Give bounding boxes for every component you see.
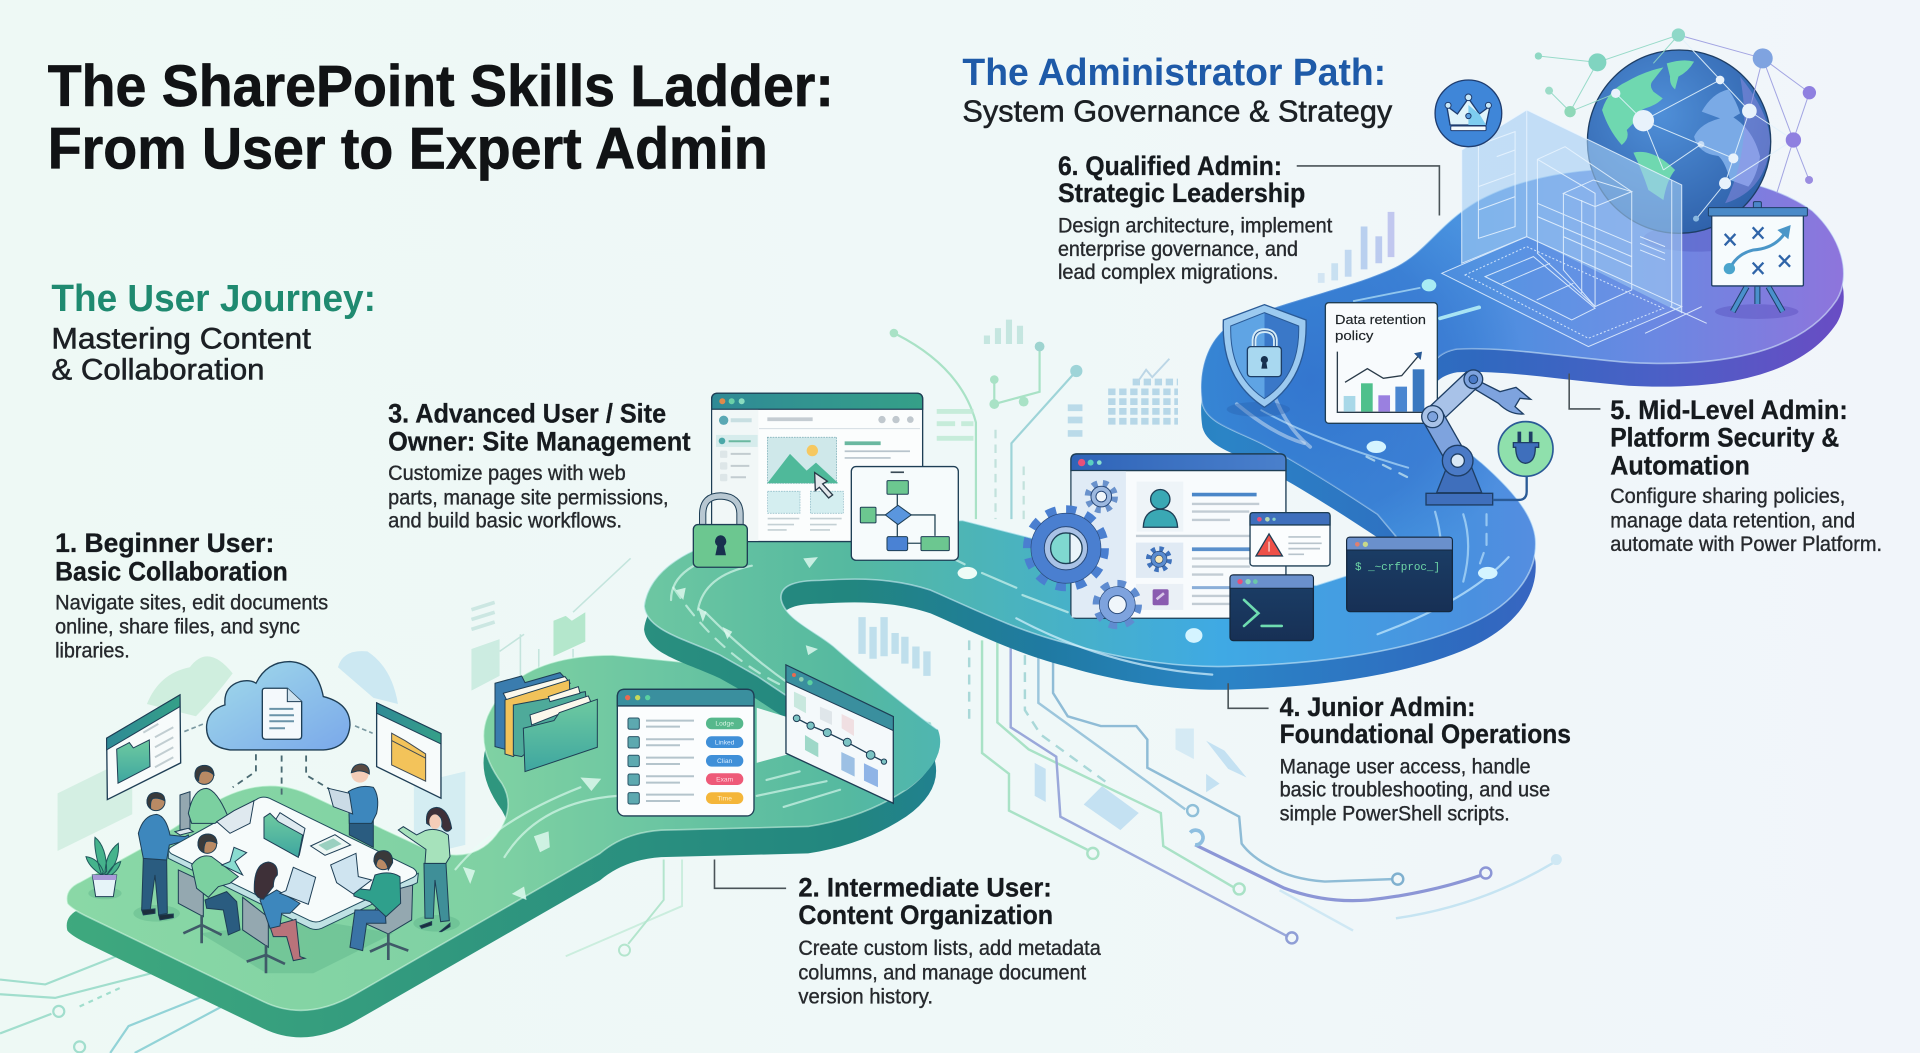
icon: admin console window (1071, 454, 1286, 618)
icon: padlock (693, 496, 747, 567)
text block: step 1 (55, 528, 328, 663)
text block: step 1: libraries. (55, 639, 130, 663)
text block: step 3: and build basic workflows. (388, 509, 622, 533)
text block: step 5 (1610, 395, 1882, 556)
icon: large gear (1029, 511, 1103, 586)
person seated, green, with laptop (178, 834, 247, 943)
person standing, blue (138, 793, 190, 920)
road glowing nodes (958, 279, 1498, 643)
heading: the administrator path: The Administrator Path: (962, 52, 1386, 94)
network nodes (1535, 28, 1816, 222)
pale data marks below blue road (1035, 729, 1247, 830)
icon: right browser with folder (377, 703, 441, 798)
dashed cloud connectors (233, 754, 331, 796)
text block: step 4: Manage user access, handle (1280, 754, 1531, 778)
text block: step 3: Customize pages with web (388, 461, 626, 485)
text block: step 3 (388, 398, 691, 533)
icon: security shield (1223, 305, 1306, 417)
network links (1538, 35, 1809, 218)
text block: step 3: 3. Advanced User / Site (388, 398, 666, 428)
road: lower green section with platform (67, 655, 936, 1037)
status pill: green: Lodge (715, 721, 734, 728)
title: The SharePoint Skills Ladder: (48, 54, 834, 119)
heading: the user journey (51, 278, 376, 387)
text block: step 6: Strategic Leadership (1058, 178, 1305, 208)
heading: the administrator path: System Governance & Strategy (962, 95, 1393, 129)
folder on table (264, 813, 351, 857)
icon: crown badge (1435, 80, 1502, 147)
status pill: blue 2: Clian (717, 758, 733, 765)
text block: step 6 (1058, 151, 1332, 284)
list rows (628, 718, 639, 804)
connector: step 4 (1228, 683, 1269, 708)
pale bar chart: hole in road (862, 617, 927, 676)
pale clouds behind workshop (147, 651, 398, 716)
continents (1602, 60, 1694, 200)
status pill: blue: Linked (715, 739, 735, 746)
icon: script terminal: $ _~crfproc_] (1355, 562, 1440, 574)
person standing, light green (398, 807, 452, 932)
heading: the user journey: The User Journey: (51, 278, 376, 320)
title: From User to Expert Admin (48, 116, 768, 181)
text block: step 2: Create custom lists, add metadata (798, 936, 1101, 960)
status pill: red: Exam (716, 776, 734, 783)
icon: stack of folders (495, 673, 597, 772)
text block: step 6: Design architecture, implement (1058, 213, 1332, 237)
workshop shadows (88, 887, 460, 973)
text block: step 4: 4. Junior Admin: (1280, 692, 1476, 722)
status pill: yellow: Time (717, 795, 732, 802)
icon: medium gear (1097, 585, 1137, 625)
pale bar chart: upper middle (987, 320, 1020, 344)
circuit lines: below green road (566, 860, 682, 956)
icon: data retention policy card: Data retention (1335, 313, 1426, 327)
icon: small gear, top (1089, 484, 1114, 509)
text block: step 1: 1. Beginner User: (55, 528, 274, 558)
text block: step 4: basic troubleshooting, and use (1280, 778, 1550, 802)
text block: step 2: Content Organization (798, 900, 1053, 930)
text block: step 1: Basic Collaboration (55, 556, 288, 586)
icon: data retention policy card: policy (1335, 329, 1374, 343)
icon: workflow card (851, 467, 958, 560)
heading: the user journey: Mastering Content (51, 322, 311, 355)
text block: step 5: manage data retention, and (1610, 509, 1855, 533)
text block: step 4 (1280, 692, 1571, 825)
circuit lines: bottom left (0, 956, 227, 1053)
workshop: team around table (86, 764, 460, 973)
road direction arrows (463, 557, 818, 900)
title (48, 54, 834, 181)
heading: the user journey: & Collaboration (51, 354, 264, 387)
icon: small gear, middle (1149, 549, 1169, 569)
icon: cloud with document (184, 662, 373, 750)
text block: step 5: automate with Power Platform. (1610, 532, 1882, 556)
person seated right, teal with laptop (331, 851, 413, 960)
text block: step 3: parts, manage site permissions, (388, 485, 669, 509)
text block: step 6: 6. Qualified Admin: (1058, 151, 1282, 181)
connector: step 2 (714, 860, 786, 888)
plant (86, 837, 121, 897)
text block: step 5: Platform Security & (1610, 423, 1839, 453)
connector: step 6 (1297, 166, 1439, 215)
person seated, woman with laptop (243, 862, 316, 973)
heading: the administrator path (962, 52, 1393, 129)
circuit lines: above road (890, 329, 1082, 519)
text block: step 2: version history. (798, 984, 933, 1008)
icon: script terminal (1347, 537, 1452, 612)
pale panels behind workshop (58, 757, 465, 857)
road: upper section, green through blue to purple (644, 159, 1844, 808)
text block: step 5: Configure sharing policies, (1610, 484, 1845, 508)
network links and nodes (1535, 28, 1816, 222)
icon: version history window (786, 665, 893, 803)
pale pixel chart (937, 359, 1178, 438)
icon: robot arm (1422, 370, 1531, 505)
icon: left browser with folder (107, 695, 181, 800)
icon: command prompt window (1230, 575, 1313, 641)
icon: strategy presentation board (1708, 202, 1807, 319)
text block: step 2: 2. Intermediate User: (798, 872, 1052, 902)
text block: step 6: enterprise governance, and (1058, 237, 1298, 261)
pale bars beside qualified admin (1321, 212, 1391, 283)
icon: translucent blueprint (1442, 110, 1707, 347)
icon: alert window (1250, 513, 1330, 566)
text block: step 5: 5. Mid-Level Admin: (1610, 395, 1848, 425)
icon: data retention policy card (1325, 303, 1437, 423)
text block: step 5: Automation (1610, 451, 1750, 481)
list lines (646, 721, 694, 801)
table (168, 797, 418, 929)
text block: step 1: online, share files, and sync (55, 615, 300, 639)
pale document icons near folders (471, 558, 631, 698)
connector: step 5 (1569, 373, 1600, 409)
text block: step 4: simple PowerShell scripts. (1280, 801, 1510, 825)
text block: step 1: Navigate sites, edit documents (55, 591, 328, 615)
icon: site page window (712, 393, 923, 542)
circuit lines: below blue road (969, 640, 1562, 943)
road lane markings (456, 373, 1509, 869)
text block: step 2 (798, 872, 1101, 1008)
icon: network globe (1587, 50, 1771, 252)
icon: power plug (1493, 422, 1553, 500)
person with tablet, blue (328, 764, 378, 847)
text block: step 2: columns, and manage document (798, 961, 1086, 985)
person back, green with laptop (175, 765, 254, 835)
text block: step 3: Owner: Site Management (388, 427, 691, 457)
text block: step 6: lead complex migrations. (1058, 260, 1278, 284)
icon: list window with status pills (617, 689, 754, 816)
text block: step 4: Foundational Operations (1280, 719, 1571, 749)
